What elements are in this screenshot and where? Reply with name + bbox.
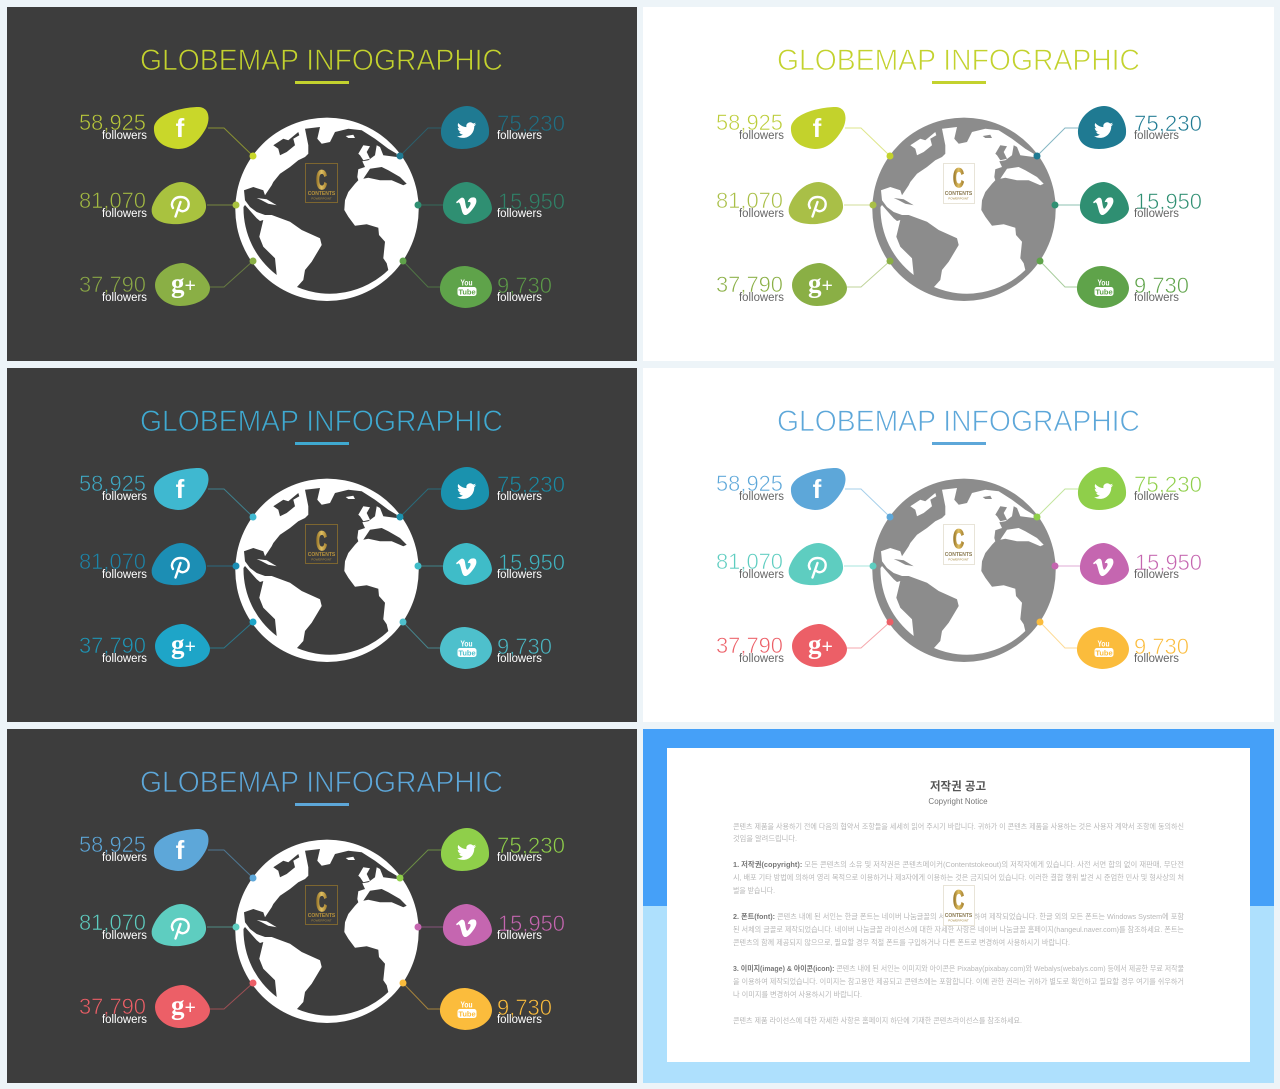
paragraph: image and icon: 나 이미지를 변경하여 사용하시기 바랍니다. [733,989,862,999]
stat: facebook: f [176,835,185,865]
stat: twitter: followers [1134,491,1179,503]
panel background [7,7,637,361]
stat: vimeo [414,182,565,224]
logo: CONTENTS [945,552,973,558]
stat: twitter: followers [497,130,542,142]
stat: youtube: You [460,638,472,648]
stat: facebook: f [176,474,185,504]
logo [306,524,338,564]
closing paragraph: 콘텐츠 제품 라이선스에 대한 자세한 사항은 홈페이지 하단에 기재한 콘텐츠라이선스를 참조하세요. [733,1015,1022,1025]
stat: twitter [396,828,565,882]
title underline [295,81,349,84]
stat: google plus: 37,790 [716,272,783,297]
slide: light multicolor [643,368,1274,722]
stat: google plus: 37,790 [79,994,146,1019]
stat: facebook [79,829,256,882]
white card [667,748,1250,1062]
stat: pinterest: followers [102,208,147,220]
stat: youtube: You [460,1000,472,1010]
stat: pinterest: 81,070 [79,549,146,574]
panel background [643,7,1274,361]
stat: google plus: followers [739,653,784,665]
stat: vimeo [414,904,565,946]
stat: google plus: 37,790 [79,272,146,297]
light blue background bottom [643,906,1274,1083]
stat: youtube: 9,730 [497,273,552,298]
stat: youtube: Tube [458,288,476,296]
stat: vimeo: 15,950 [498,550,565,575]
logo: C [953,885,964,915]
stat: twitter [396,467,565,520]
title underline [295,442,349,445]
stat: vimeo: 15,950 [498,911,565,936]
stat: facebook: followers [102,852,147,864]
logo: C [316,526,327,556]
title underline [932,81,986,84]
paragraph: copyright: 벌을 받습니다. [733,885,775,895]
stat: facebook: 58,925 [79,832,146,857]
paragraph: image and icon [733,963,1184,999]
stat: google plus [716,258,894,306]
logo [944,524,974,564]
logo: POWERPOINT [311,558,332,562]
panel background [643,368,1274,722]
intro paragraph [733,821,1184,843]
stat: pinterest: 81,070 [79,910,146,935]
paragraph: copyright: 시, 배포 기타 방법에 의하여 영리 목적으로 이용하거나 제3자에게 이용하는 것은 금지되어 있습니다. 이러한 결합 행위 발견 시 준엄한 민사 및 형사상의 처 [733,872,1184,882]
stat: youtube: You [1098,278,1110,288]
panel background [7,729,637,1083]
slide: light lime and teal [643,7,1274,361]
logo: CONTENTS [308,552,336,558]
stat: youtube [400,618,552,669]
stat: pinterest: followers [739,569,784,581]
stat: google plus [79,980,256,1028]
stat: youtube: Tube [1095,648,1113,658]
logo [944,163,974,204]
stat: youtube: 9,730 [1134,634,1189,659]
logo: POWERPOINT [948,918,969,922]
stat: pinterest: followers [102,930,147,942]
stat: youtube: 9,730 [497,995,552,1020]
stat: twitter [396,106,565,160]
stat: youtube: Tube [458,1010,476,1018]
stat: twitter: 75,230 [1134,111,1202,136]
stat: pinterest [716,182,876,224]
stat: twitter: followers [497,852,542,864]
stat: vimeo: followers [1134,208,1179,220]
stat: facebook: f [813,113,822,143]
stat: pinterest: followers [739,208,784,220]
slide: dark multicolor [7,729,637,1083]
stat: youtube [400,980,552,1030]
stat: youtube [1036,618,1189,669]
stat: vimeo: 15,950 [498,189,565,214]
intro paragraph: 것임을 알려드립니다. [733,833,797,843]
title: GLOBEMAP INFOGRAPHIC [777,405,1140,438]
stat: pinterest [79,543,240,585]
stat: google plus: followers [102,653,147,665]
stat: youtube: 9,730 [497,634,552,659]
stat: pinterest: 81,070 [716,549,783,574]
logo: CONTENTS [945,191,973,197]
logo [306,886,338,924]
title underline [932,442,986,445]
stat: google plus [79,258,256,306]
slide: dark lime and teal [7,7,637,361]
stat: youtube: followers [497,653,542,665]
stat: facebook: followers [102,130,147,142]
stat: vimeo [414,543,565,585]
stat: google plus: g+ [171,990,196,1020]
logo [944,885,974,926]
stat: facebook [79,468,256,520]
stat: facebook: f [813,474,822,504]
stat: google plus [79,618,256,667]
stat: twitter: 75,230 [497,833,565,858]
stat: facebook: 58,925 [716,110,783,135]
logo: C [316,165,327,195]
slide: dark blue [7,368,637,722]
logo: C [953,524,964,554]
stat: youtube: Tube [1095,288,1113,296]
stat: google plus: g+ [171,268,196,298]
stat: vimeo: followers [1134,569,1179,581]
stat: twitter [1034,106,1202,160]
stat: facebook [716,107,894,160]
title underline [295,803,349,806]
title: GLOBEMAP INFOGRAPHIC [140,44,503,77]
stat: google plus: followers [102,292,147,304]
paragraph: font: 2. 폰트(font): 콘텐츠 내에 된 서인는 한글 폰트는 네이버 나눔글꼴의 서체를 사용하여 제작되었습니다. 한글 외의 모든 폰트는 Windows System에 포함 [733,911,1184,921]
logo: CONTENTS [308,191,336,197]
globe [235,118,419,301]
stat: vimeo: 15,950 [1135,189,1202,214]
stat: facebook: followers [739,130,784,142]
stat: youtube [1036,258,1189,308]
globe [235,479,419,662]
stat: facebook: 58,925 [79,471,146,496]
intro paragraph: 콘텐츠 제품을 사용하기 전에 다음의 협약서 조항들을 세세히 읽어 주시기 바랍니다. 귀하가 이 콘텐츠 제품을 사용하는 것은 사용자 계약서 조항에 동의하신 [733,821,1184,831]
title: GLOBEMAP INFOGRAPHIC [777,44,1140,77]
paragraph: image and icon: 3. 이미지(image) & 아이콘(icon): 콘텐츠 내에 된 서인는 이미지와 아이콘은 Pixabay(pixabay.com)와 Webalys(webalys.com) 등에서 제공한 무료 저작물 [733,963,1184,973]
stat: pinterest [79,182,240,224]
logo: POWERPOINT [311,918,332,922]
stat: youtube: followers [1134,292,1179,304]
title: GLOBEMAP INFOGRAPHIC [140,405,503,438]
stat: pinterest [716,543,876,585]
stat: youtube [400,258,552,308]
stat: facebook [79,107,256,160]
stat: vimeo: followers [497,208,542,220]
stat: facebook: f [176,113,185,143]
blue background top [643,729,1274,906]
paragraph: copyright: 1. 저작권(copyright): 모든 콘텐츠의 소유 및 저작권은 콘텐츠메이커(Contentstokeout)의 저작자에게 있습니다. 사전 서면 합의 없이 재판매, 무단전 [733,859,1184,869]
stat: facebook: followers [102,491,147,503]
stat: facebook: 58,925 [716,471,783,496]
stat: youtube: followers [497,1014,542,1026]
slide: copyright notice [643,729,1274,1083]
stat: twitter [1034,467,1202,520]
stat: twitter: followers [497,491,542,503]
logo: C [953,163,964,193]
stat: vimeo: 15,950 [1135,550,1202,575]
stat: youtube: You [460,278,472,288]
stat: pinterest: 81,070 [79,188,146,213]
stat: google plus: g+ [808,629,833,659]
notice heading: 저작권 공고 [930,779,986,793]
stat: vimeo [1052,182,1202,224]
stat: facebook [716,468,894,520]
stat: twitter: 75,230 [497,472,565,497]
logo: POWERPOINT [311,196,332,200]
logo [306,164,338,202]
stat: vimeo: followers [497,569,542,581]
paragraph: copyright [733,859,1184,895]
stat: facebook: followers [739,491,784,503]
stat: pinterest: followers [102,569,147,581]
stat: youtube: followers [1134,653,1179,665]
stat: google plus: 37,790 [79,633,146,658]
globe [235,840,419,1023]
paragraph: font: 된 서체의 글꼴로 제작되었습니다. 네이버 나눔글꼴 라이선스에 대한 자세한 사항은 네이버 나눔글꼴 홈페이지(hangeul.naver.com)를 참조하세요. 폰트는 [733,924,1184,934]
globe [872,479,1056,662]
stat: pinterest: 81,070 [716,188,783,213]
stat: google plus [716,618,894,667]
globe [872,118,1056,301]
panel background [7,368,637,722]
logo: POWERPOINT [948,196,969,200]
stat: google plus: followers [739,292,784,304]
stat: youtube: You [1098,638,1110,648]
stat: twitter: followers [1134,130,1179,142]
stat: pinterest [79,904,240,946]
stat: twitter: 75,230 [1134,472,1202,497]
stat: twitter: 75,230 [497,111,565,136]
stat: google plus: g+ [808,268,833,298]
stat: youtube: Tube [458,648,476,658]
paragraph: font: 콘텐츠의 함께 제공되지 않으므로, 필요할 경우 적절 폰트를 구입하거나 다른 폰트로 변경하여 사용하시기 바랍니다. [733,937,1070,947]
logo: C [316,887,327,917]
notice subheading: Copyright Notice [928,797,988,806]
stat: google plus: followers [102,1014,147,1026]
stat: youtube: followers [497,292,542,304]
paragraph: image and icon: 을 이용하여 제작되었습니다. 이미지는 참고용만 제공되고 콘텐츠에는 포함합니다. 이에 관한 권리는 귀하가 별도로 확인하고 필요할 경우 여기를 쉬우하거 [733,976,1184,986]
logo: CONTENTS [945,913,973,919]
logo: POWERPOINT [948,558,969,562]
logo: CONTENTS [308,913,336,919]
title: GLOBEMAP INFOGRAPHIC [140,766,503,799]
stat: google plus: 37,790 [716,633,783,658]
stat: vimeo: followers [497,930,542,942]
stat: facebook: 58,925 [79,110,146,135]
paragraph: font [733,911,1184,947]
stat: vimeo [1052,543,1202,585]
stat: google plus: g+ [171,629,196,659]
stat: youtube: 9,730 [1134,273,1189,298]
